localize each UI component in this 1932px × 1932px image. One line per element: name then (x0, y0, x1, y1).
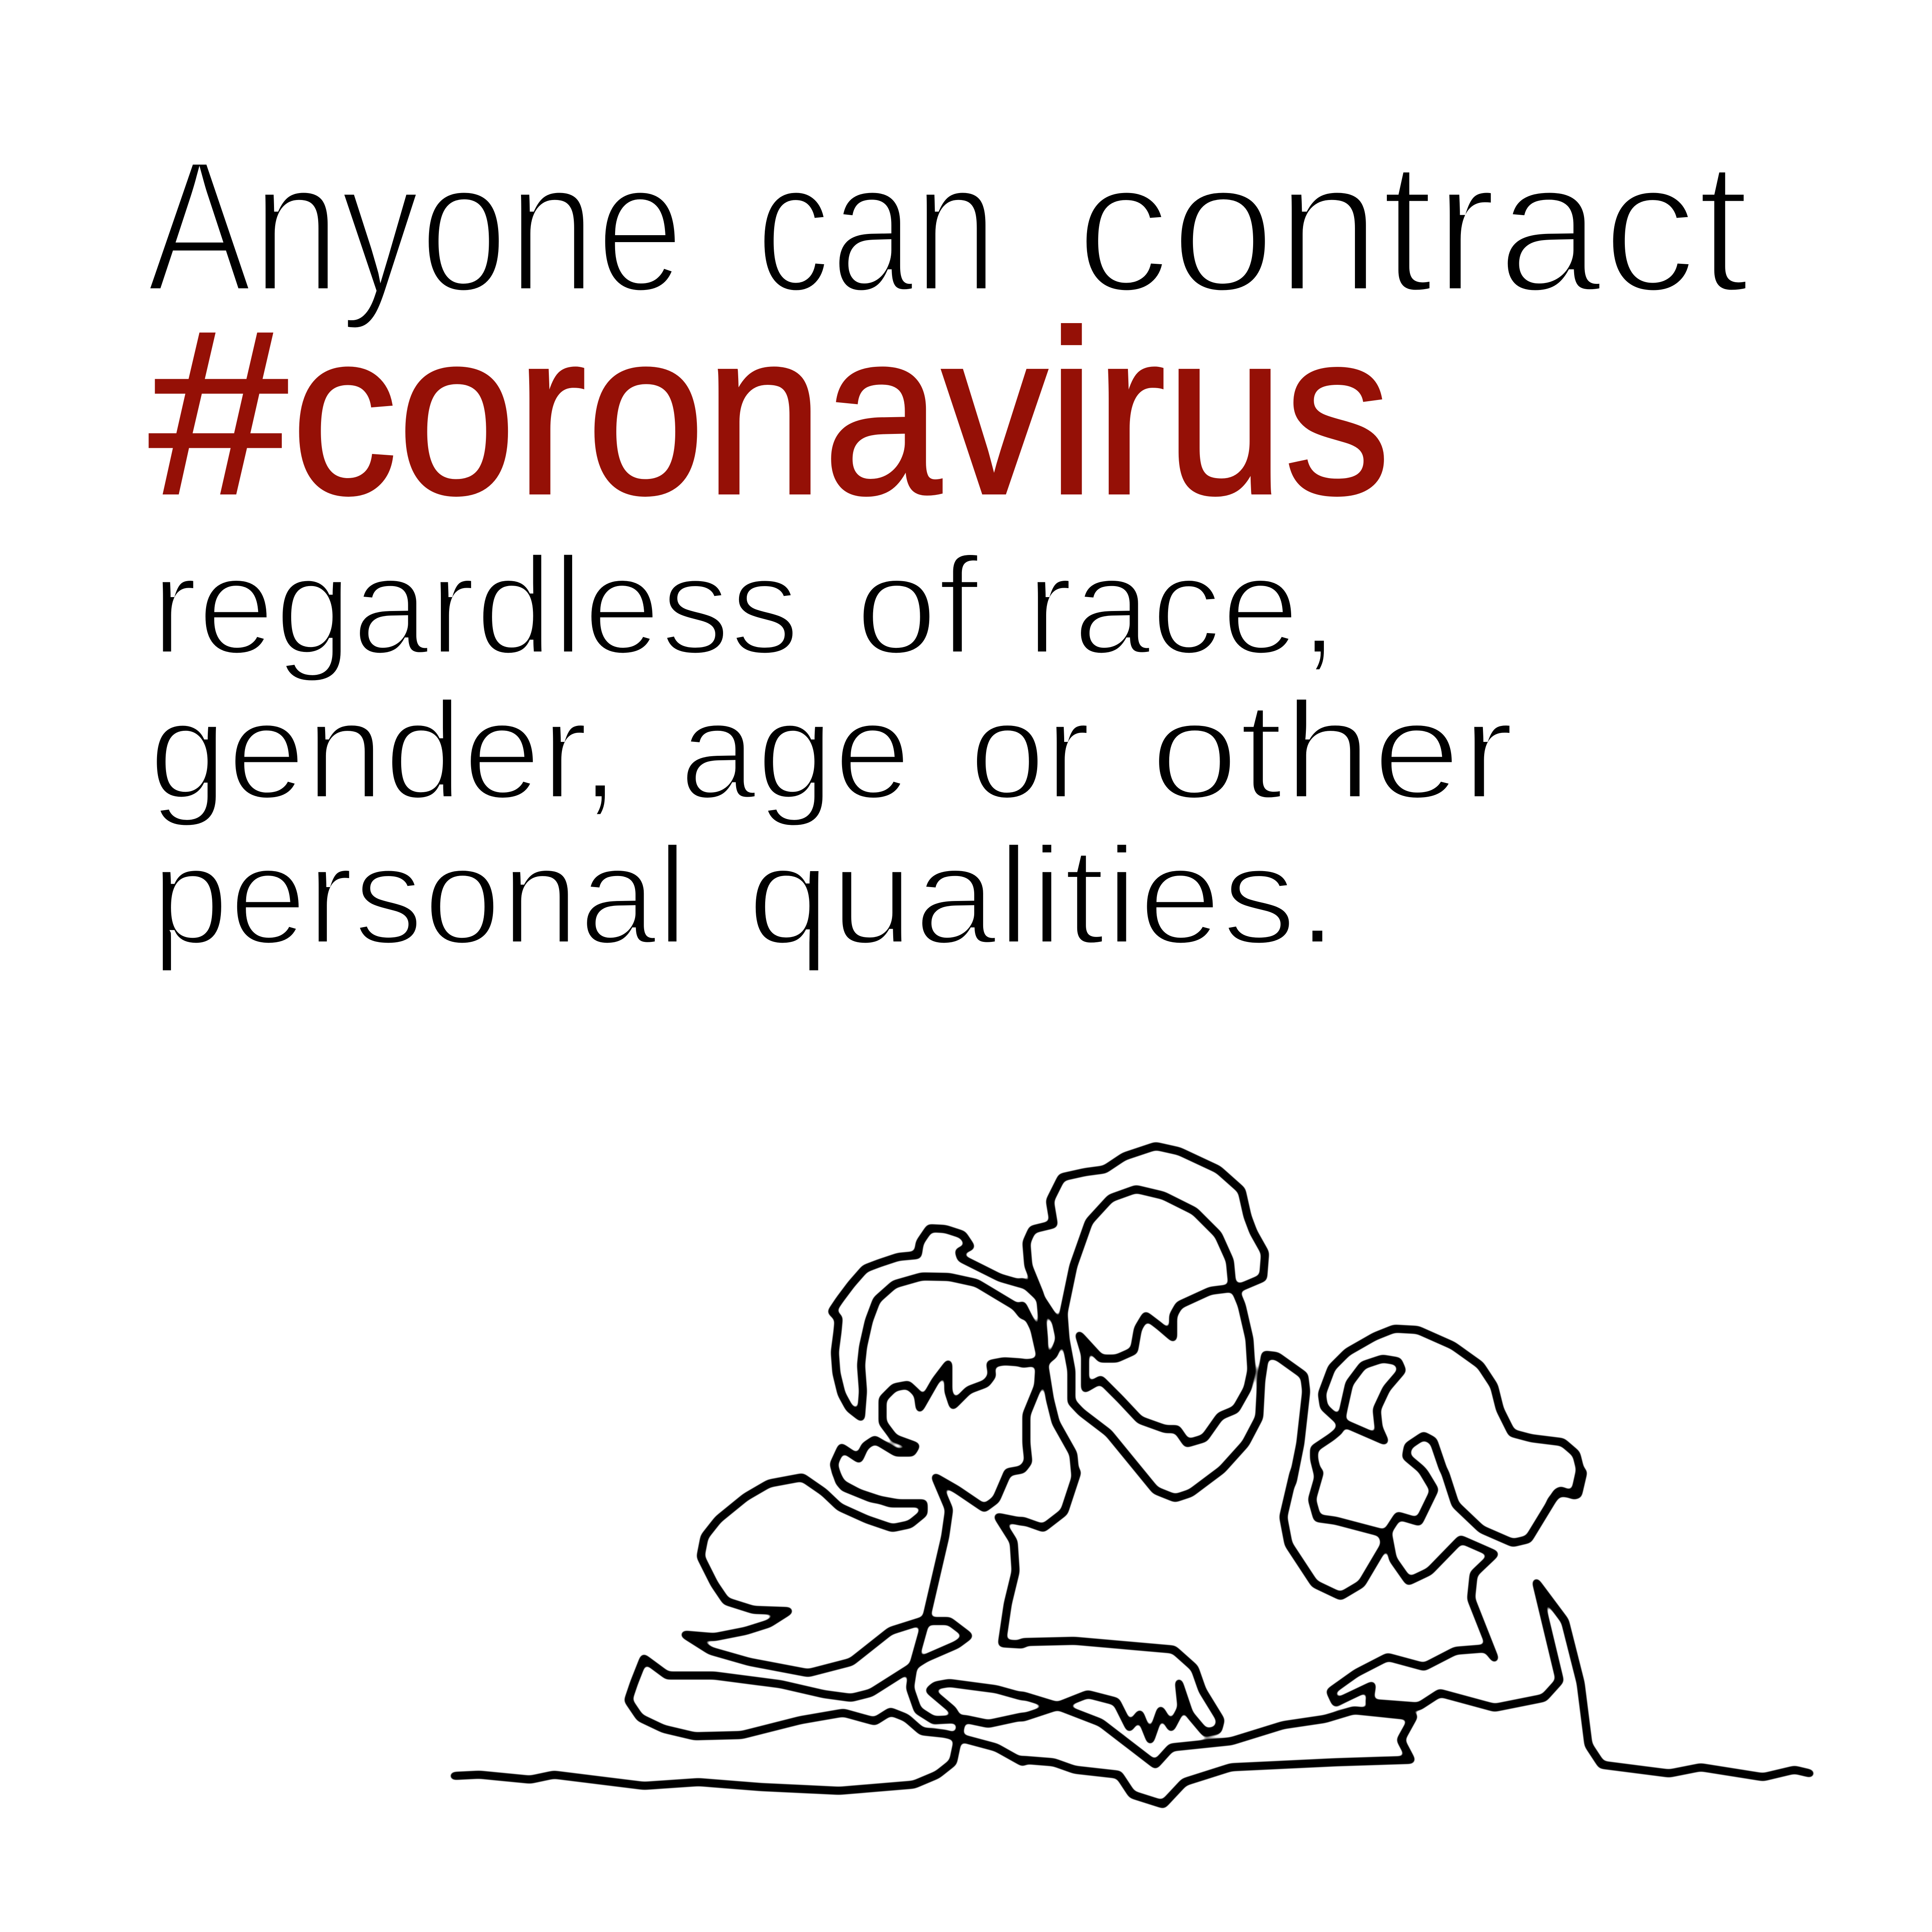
child body, arm and left page (454, 1472, 1023, 1791)
heading: #coronavirus: # (149, 282, 290, 543)
text line: gender, age or other: age (679, 673, 911, 829)
heading: Anyone can contract: contract (1076, 121, 1750, 331)
text line: personal qualities.: qualities. (747, 818, 1338, 974)
text line: regardless of race, (151, 528, 1339, 684)
illustration: continuous line drawing of a family reading a book (454, 1146, 1810, 1804)
text line: personal qualities.: personal (151, 818, 688, 974)
text line: regardless of race,: regardless (151, 528, 800, 684)
text line: gender, age or other: or (969, 673, 1091, 828)
text line: personal qualities. (151, 818, 1338, 974)
father head and mother head (1008, 1146, 1580, 1501)
text line: regardless of race,: of (855, 528, 979, 683)
heading: #coronavirus: coronavirus (291, 282, 1391, 543)
text line: gender, age or other: other (1150, 673, 1514, 828)
child head upper (832, 1228, 1023, 1503)
text line: gender, age or other: gender, (149, 673, 620, 829)
father arm, open book, mother arm and table line (1022, 1472, 1810, 1804)
text line: regardless of race,: race, (1026, 528, 1339, 683)
text line: gender, age or other (149, 673, 1514, 829)
heading: Anyone can contract: Anyone (146, 121, 684, 332)
heading: Anyone can contract (146, 121, 1750, 332)
heading: Anyone can contract: can (756, 121, 997, 331)
